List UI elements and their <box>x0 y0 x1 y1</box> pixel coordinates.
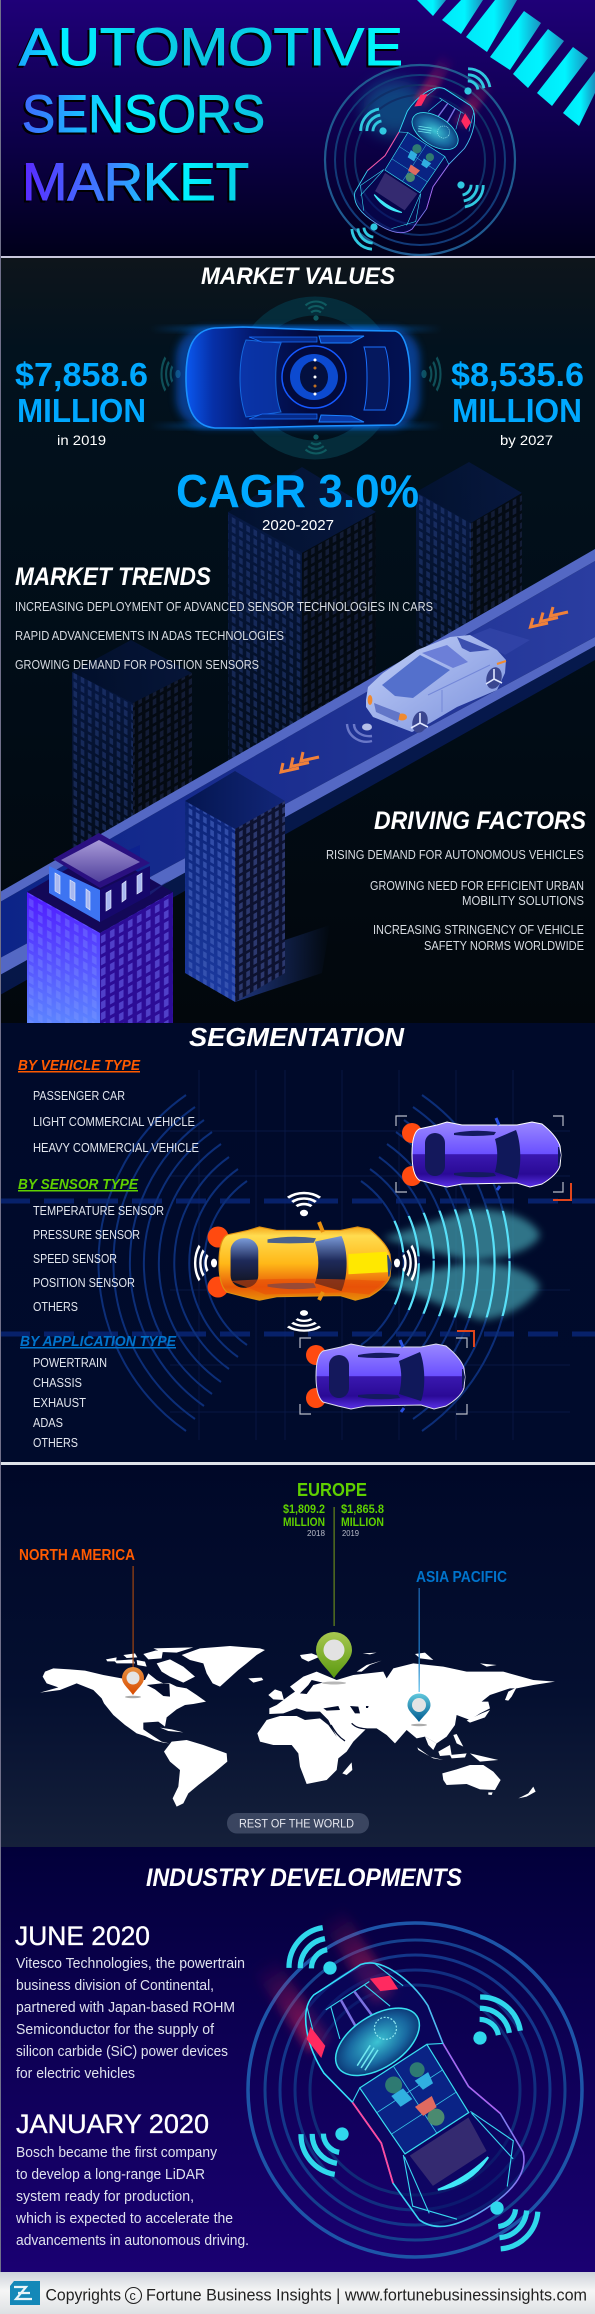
callout: asia pacific: ASIA PACIFIC <box>416 1569 507 1586</box>
radar arcs <box>98 1095 510 1431</box>
text block: june 2020: business division of Continental, <box>16 1977 214 1994</box>
callout: asia pacific <box>408 1569 507 1726</box>
building: purple foreground <box>27 833 173 1023</box>
icon: left wifi <box>195 1246 217 1280</box>
stat: CAGR: CAGR 3.0% <box>176 465 419 517</box>
text block: january 2020 <box>15 2109 249 2249</box>
list: by application type: EXHAUST <box>33 1396 86 1410</box>
callout: europe: EUROPE <box>297 1480 367 1500</box>
illustration: purple car lower <box>300 1331 474 1414</box>
callout: europe <box>283 1480 385 1684</box>
stat: 2027 value: $8,535.6 <box>451 356 584 393</box>
panel: industry developments <box>0 1847 595 2272</box>
stat: 2027 value: MILLION <box>452 392 582 429</box>
text block: june 2020: silicon carbide (SiC) power devices <box>16 2043 228 2060</box>
building: centre foreground <box>185 771 330 1002</box>
stat: 2019 value <box>15 356 148 448</box>
heading: industry developments: INDUSTRY DEVELOPMENTS <box>146 1864 462 1892</box>
icon: right wifi <box>394 1246 416 1280</box>
label: rest of the world <box>227 1813 369 1834</box>
text block: june 2020: for electric vehicles <box>16 2065 135 2082</box>
building: right background <box>416 462 522 660</box>
title <box>19 18 403 212</box>
heading: segmentation: SEGMENTATION <box>189 1022 405 1052</box>
callout: europe: $1,865.8 <box>341 1504 385 1516</box>
car on road <box>366 628 530 735</box>
text block: january 2020: to develop a long-range LiDAR <box>16 2166 205 2183</box>
text block: market trends: GROWING DEMAND FOR POSITION SENSORS <box>15 658 259 672</box>
stat: 2019 value: in 2019 <box>57 432 106 448</box>
list: by application type: ADAS <box>33 1416 63 1430</box>
icon: car with sensor rings <box>325 50 515 255</box>
callout: europe: 2018 <box>307 1528 325 1538</box>
building: centre background <box>228 467 376 780</box>
list: by vehicle type: LIGHT COMMERCIAL VEHICLE <box>33 1115 195 1129</box>
list: by application type: BY APPLICATION TYPE <box>20 1333 177 1350</box>
map: eurasia africa oceania <box>257 1653 555 1798</box>
footer <box>0 2272 595 2314</box>
title: SENSORS <box>22 85 265 144</box>
illustration: blue car with sensors <box>150 302 442 453</box>
road <box>0 549 595 995</box>
cyan sensor beams <box>382 1204 544 1325</box>
text block: january 2020: which is expected to accelerate the <box>15 2210 233 2227</box>
panel: segmentation <box>0 1022 595 1462</box>
list: by application type: CHASSIS <box>33 1376 82 1390</box>
list: by sensor type: POSITION SENSOR <box>33 1276 135 1290</box>
footer: Fortune Business Insights | www.fortunebusinessinsights.com <box>146 2286 587 2304</box>
text block: january 2020: JANUARY 2020 <box>16 2109 209 2139</box>
text block: driving factors <box>326 807 586 953</box>
label: rest of the world: REST OF THE WORLD <box>239 1816 354 1830</box>
list: by sensor type <box>18 1176 164 1314</box>
callout: europe: 2019 <box>342 1528 359 1538</box>
title: MARKET <box>22 153 249 212</box>
heading: market values: MARKET VALUES <box>201 263 396 290</box>
text block: market trends: INCREASING DEPLOYMENT OF ADVANCED SENSOR TECHNOLOGIES IN CARS <box>15 600 433 614</box>
text block: june 2020: Semiconductor for the supply of <box>16 2021 215 2038</box>
text block: market trends: RAPID ADVANCEMENTS IN ADAS TECHNOLOGIES <box>15 629 284 643</box>
callout: north america: NORTH AMERICA <box>19 1547 135 1564</box>
icon: copyright mark <box>126 2288 142 2304</box>
stat: 2027 value: by 2027 <box>500 432 553 448</box>
decorative left edge <box>0 0 1 2272</box>
list: by vehicle type: PASSENGER CAR <box>33 1089 125 1103</box>
stat: 2019 value: MILLION <box>17 392 146 429</box>
list: by vehicle type <box>18 1057 199 1155</box>
callout: europe: $1,809.2 <box>283 1504 325 1516</box>
text block: market trends: MARKET TRENDS <box>15 563 211 591</box>
list: by sensor type: BY SENSOR TYPE <box>18 1176 139 1193</box>
panel: header <box>0 0 595 257</box>
callout: north america <box>19 1547 144 1698</box>
stat: 2019 value: $7,858.6 <box>15 356 148 393</box>
icon: top wifi <box>288 1193 320 1216</box>
icon: bottom wifi <box>288 1310 320 1331</box>
world map <box>40 1646 555 1807</box>
icon: logo <box>10 2281 40 2305</box>
list: by application type: OTHERS <box>33 1436 78 1450</box>
footer: Copyrights <box>46 2286 121 2304</box>
text block: driving factors: MOBILITY SOLUTIONS <box>462 894 584 908</box>
list: by application type <box>20 1333 177 1450</box>
text block: june 2020: Vitesco Technologies, the powertrain <box>16 1955 245 1972</box>
text block: june 2020: partnered with Japan-based ROHM <box>16 1999 235 2016</box>
list: by sensor type: SPEED SENSOR <box>33 1252 117 1266</box>
decorative crosswalk stripes <box>417 0 595 126</box>
stat: 2027 value <box>451 356 584 448</box>
icon: copyright mark: c <box>130 2289 136 2303</box>
list: by vehicle type: BY VEHICLE TYPE <box>18 1057 141 1074</box>
list: by sensor type: PRESSURE SENSOR <box>33 1228 140 1242</box>
icon: road sensor waves <box>347 724 372 742</box>
list: by application type: POWERTRAIN <box>33 1356 107 1370</box>
illustration: car with sensor rings <box>248 1895 582 2257</box>
callout: europe: MILLION <box>283 1517 325 1529</box>
title: AUTOMOTIVE <box>19 18 403 77</box>
list: by sensor type: OTHERS <box>33 1300 78 1314</box>
callout: europe: MILLION <box>341 1517 384 1529</box>
list: by sensor type: TEMPERATURE SENSOR <box>33 1204 164 1218</box>
text block: june 2020 <box>15 1921 245 2082</box>
text block: january 2020: Bosch became the first company <box>16 2144 217 2161</box>
list: by vehicle type: HEAVY COMMERCIAL VEHICLE <box>33 1141 199 1155</box>
stat: CAGR: 2020-2027 <box>262 517 334 534</box>
text block: june 2020: JUNE 2020 <box>15 1921 150 1951</box>
panel: regional map <box>0 1462 595 1847</box>
penthouse <box>49 833 150 922</box>
panel: market overview background <box>0 256 595 1023</box>
illustration: purple car upper <box>396 1116 571 1200</box>
text block: january 2020: advancements in autonomous driving. <box>16 2232 249 2249</box>
text block: january 2020: system ready for production, <box>16 2188 194 2205</box>
building: left background <box>72 640 192 860</box>
chevrons <box>281 607 568 772</box>
illustration: yellow car centre <box>195 1193 416 1331</box>
text block: market trends <box>15 563 433 672</box>
map: americas and greenland <box>40 1646 265 1807</box>
